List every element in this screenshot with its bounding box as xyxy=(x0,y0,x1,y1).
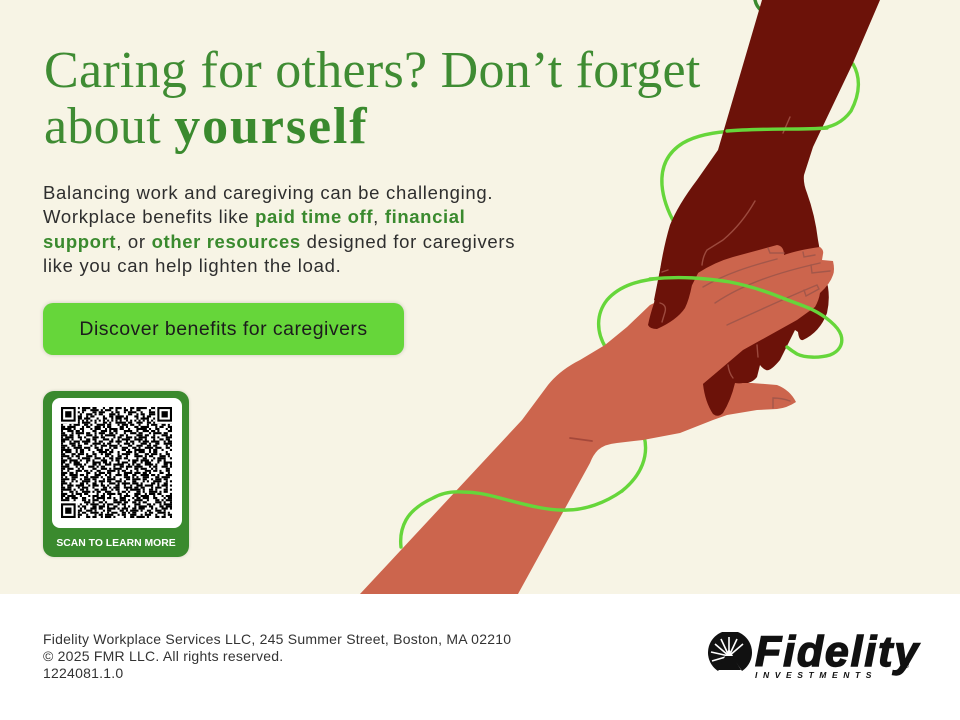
footer address text: Fidelity Workplace Services LLC, 245 Summer Street, Boston, MA 02210 xyxy=(43,631,511,647)
title: Caring for others? Don’t forget xyxy=(44,42,701,99)
footer address text: © 2025 FMR LLC. All rights reserved. xyxy=(43,648,283,664)
dark thumb xyxy=(648,235,698,329)
QR code xyxy=(61,407,172,518)
logo sunburst icon xyxy=(708,632,752,671)
title: about yourself xyxy=(44,98,368,155)
body text: like you can help lighten the load. xyxy=(43,255,341,276)
light hand and arm xyxy=(360,245,834,594)
body text: Workplace benefits like paid time off, financial xyxy=(43,206,465,227)
body text xyxy=(43,182,515,276)
logo subtitle: INVESTMENTS xyxy=(755,670,877,680)
button: discover benefits xyxy=(43,303,404,355)
button: discover benefits: Discover benefits for caregivers xyxy=(79,318,368,340)
dark fingers over light hand xyxy=(703,345,760,416)
ribbon in front of hands xyxy=(401,128,842,547)
body text: support, or other resources designed for caregivers xyxy=(43,231,515,252)
title xyxy=(44,42,701,155)
QR code panel xyxy=(43,391,189,557)
QR code card xyxy=(52,398,182,528)
body text: Balancing work and caregiving can be challenging. xyxy=(43,182,493,203)
QR caption: SCAN TO LEARN MORE xyxy=(56,538,176,549)
footer address text: 1224081.1.0 xyxy=(43,665,123,681)
QR finder patterns xyxy=(61,407,172,518)
logo registered mark: ® xyxy=(904,663,909,670)
dark hand and arm xyxy=(654,0,880,416)
logo wordmark: Fidelity xyxy=(755,628,920,676)
ribbon behind hands xyxy=(599,0,858,491)
skin creases xyxy=(570,117,830,441)
footer address text xyxy=(43,631,511,681)
logo: Fidelity Investments xyxy=(708,628,922,680)
